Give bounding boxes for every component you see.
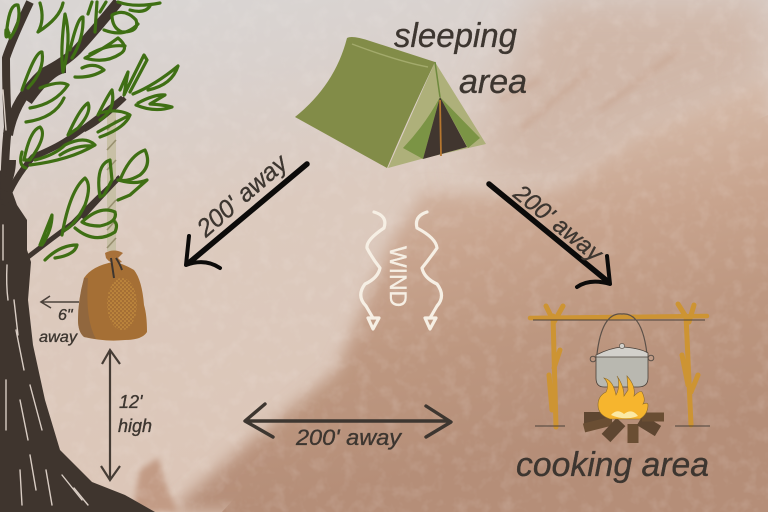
label: cooking area: cooking area: [516, 446, 709, 484]
wind arrows: [361, 212, 442, 329]
branch twigs over rope: [82, 98, 125, 218]
arrow: 6 inches: [41, 296, 79, 308]
label: left 200' away: 200' away: [191, 148, 294, 243]
pot: [596, 356, 648, 387]
frame: [530, 304, 707, 427]
campfire and pot: [530, 304, 710, 443]
label: 6" away: 6": [58, 307, 74, 324]
label: 6" away: [39, 307, 78, 346]
label: right 200' away: 200' away: [507, 179, 609, 269]
label: 6" away: away: [39, 329, 78, 346]
arrow: tent to bag: [186, 164, 307, 268]
label: sleeping area: area: [459, 63, 527, 101]
arrow: tent to cooking: [489, 184, 610, 287]
pot handle: [597, 314, 647, 354]
label: sleeping area: [394, 17, 527, 101]
tree: [0, 2, 178, 512]
logs: [584, 417, 664, 443]
label: 12' high: 12': [119, 392, 143, 412]
label: 12' high: high: [118, 416, 152, 436]
leaves: [6, 2, 178, 260]
trunk and roots: [0, 2, 155, 512]
flames: [598, 376, 648, 419]
label: sleeping area: sleeping: [394, 17, 517, 55]
arrow: bag to cooking double-headed: [245, 404, 451, 437]
rope: [107, 113, 116, 251]
label: 12' high: [118, 392, 152, 436]
arrow: 12 feet high: [101, 350, 120, 480]
label: WIND: WIND: [384, 246, 411, 307]
food bag: [78, 250, 147, 341]
label: bottom 200' away: 200' away: [295, 425, 403, 450]
tent: [295, 37, 486, 168]
